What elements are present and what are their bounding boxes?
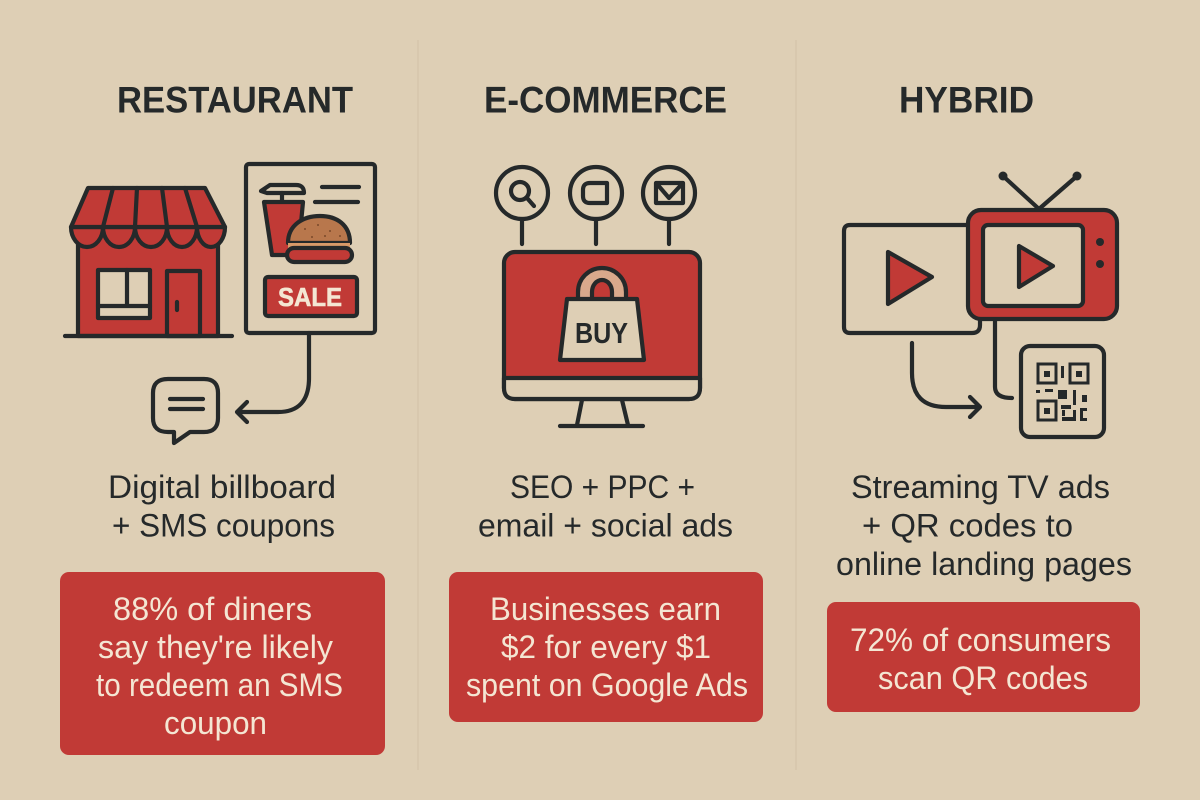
text: restaurant tactic: + SMS coupons — [112, 508, 335, 544]
callout: e-commerce stat: spent on Google Ads — [466, 667, 748, 703]
text: restaurant tactic: Digital billboard — [108, 469, 336, 505]
icon: chat bubble — [153, 379, 218, 443]
panel: e-commerce — [449, 80, 763, 722]
callout: hybrid stat: 72% of consumers — [850, 622, 1111, 658]
panel: hybrid — [827, 80, 1140, 712]
arrow: poster to chat — [237, 333, 309, 422]
callout: e-commerce stat — [449, 572, 763, 722]
icon: storefront — [65, 188, 232, 336]
icon: search circle — [496, 167, 548, 244]
callout: restaurant stat: 88% of diners — [113, 591, 312, 627]
heading: hybrid: HYBRID — [899, 80, 1034, 120]
text: hybrid tactic — [836, 469, 1132, 582]
icon: sale poster: SALE — [278, 282, 342, 312]
callout: restaurant stat: to redeem an SMS — [96, 667, 343, 703]
text: hybrid tactic: + QR codes to — [862, 508, 1073, 544]
callout: e-commerce stat: $2 for every $1 — [501, 629, 711, 665]
text: e-commerce tactic: email + social ads — [478, 508, 733, 544]
icon: video player — [844, 225, 980, 333]
callout: restaurant stat — [60, 572, 385, 755]
text: e-commerce tactic — [478, 469, 733, 544]
heading: e-commerce: E-COMMERCE — [484, 80, 727, 120]
icon: sale poster — [246, 164, 375, 333]
text: hybrid tactic: online landing pages — [836, 546, 1132, 582]
heading: restaurant: RESTAURANT — [117, 80, 353, 120]
callout: hybrid stat — [827, 602, 1140, 712]
text: hybrid tactic: Streaming TV ads — [851, 469, 1110, 505]
icon: display ad circle — [570, 167, 622, 244]
panel: restaurant — [60, 80, 385, 755]
connector: television to QR — [995, 320, 1012, 398]
icon: email circle — [643, 167, 695, 244]
icon: QR code — [1021, 346, 1104, 437]
icon: shopping bag — [560, 268, 644, 360]
callout: restaurant stat: say they're likely — [98, 629, 333, 665]
callout: e-commerce stat: Businesses earn — [490, 591, 721, 627]
icon: television — [968, 172, 1117, 319]
text: restaurant tactic — [108, 469, 336, 544]
text: e-commerce tactic: SEO + PPC + — [510, 469, 695, 505]
icon: shopping bag: BUY — [575, 318, 628, 350]
icon: desktop monitor — [504, 252, 700, 426]
callout: restaurant stat: coupon — [164, 705, 267, 741]
callout: hybrid stat: scan QR codes — [878, 660, 1088, 696]
arrow: video to QR — [912, 343, 980, 417]
